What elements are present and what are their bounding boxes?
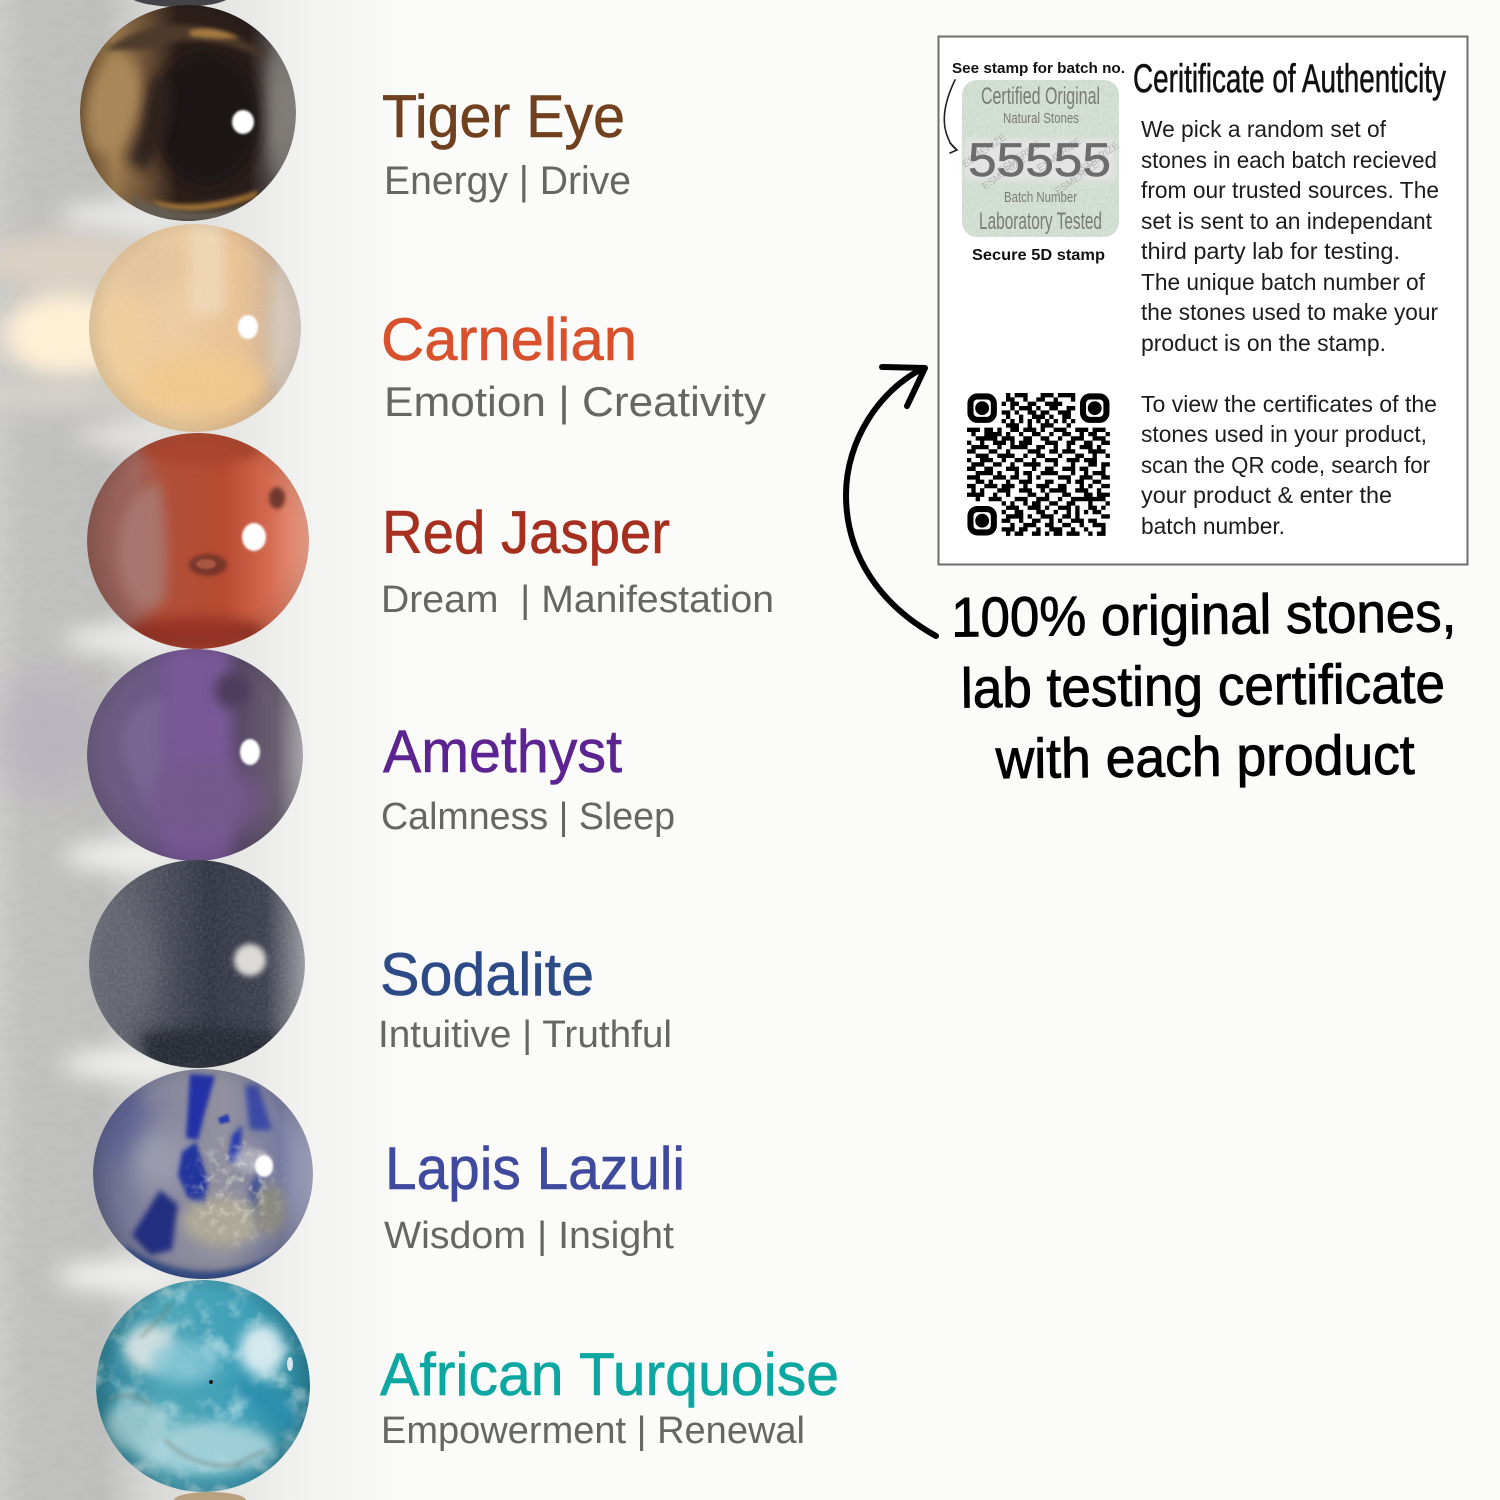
stone label: Red Jasper (381, 499, 774, 621)
callout: original stones statement: lab testing certificate (961, 651, 1445, 720)
panel: certificate of authenticity (938, 36, 1468, 564)
secure stamp: ESMERIZE (960, 132, 1009, 170)
text block: testing process: third party lab for testing. (1141, 238, 1400, 264)
callout: original stones statement (951, 580, 1458, 791)
stone label: Amethyst: Amethyst (383, 718, 622, 785)
bead: bottom fragment (174, 1492, 246, 1500)
callout: original stones statement: with each product (994, 723, 1415, 790)
secure stamp: Laboratory Tested (979, 208, 1102, 235)
icon: small pointer arrow (944, 80, 957, 153)
arrow: curved arrow pointing to certificate (846, 367, 936, 636)
secure stamp: ESMERIZE (1053, 159, 1102, 197)
bead: tiger eye (75, 5, 296, 222)
bead: sodalite (89, 860, 305, 1070)
text block: QR instructions: scan the QR code, search for (1141, 452, 1430, 478)
secure stamp: ESMERIZE (980, 154, 1029, 192)
stone label: Tiger Eye: Energy | Drive (384, 159, 631, 203)
secure stamp: Batch Number (1004, 189, 1077, 206)
stamp label: Secure 5D stamp (972, 247, 1105, 264)
background wall with shadows (0, 0, 324, 1500)
stone label: African Turquoise: Empowerment | Renewal (381, 1410, 805, 1452)
stone label: Amethyst: Calmness | Sleep (381, 796, 675, 838)
stone label: Carnelian: Carnelian (381, 306, 637, 373)
text block: testing process: We pick a random set of (1141, 116, 1386, 142)
text block: testing process: from our trusted sources. The (1141, 177, 1439, 203)
text block: testing process: stones in each batch recieved (1141, 147, 1437, 173)
secure stamp: Natural Stones (1003, 110, 1079, 127)
text block: testing process: the stones used to make your (1141, 299, 1438, 325)
secure stamp: ESMERIZE (1073, 140, 1122, 178)
bead: amethyst (87, 645, 303, 861)
secure stamp: ESMERIZE (995, 139, 1044, 177)
secure stamp: ESMERIZE (1035, 136, 1084, 174)
secure stamp: 55555 (968, 133, 1111, 186)
text block: QR instructions: your product & enter the (1141, 482, 1392, 508)
stone label: Sodalite: Intuitive | Truthful (378, 1014, 672, 1056)
text block: testing process: product is on the stamp. (1141, 330, 1386, 356)
stamp caption: See stamp for batch no. (952, 60, 1125, 77)
stone label: African Turquoise (380, 1341, 839, 1452)
text block: QR instructions (1141, 391, 1437, 539)
stone label: Lapis Lazuli: Wisdom | Insight (384, 1215, 674, 1257)
bead: red jasper (87, 433, 309, 649)
text block: QR instructions: To view the certificates of the (1141, 391, 1437, 417)
stone label: Red Jasper: Red Jasper (382, 499, 670, 566)
stone label: Amethyst (381, 718, 675, 838)
secure stamp: Certified Original (981, 83, 1100, 110)
bead: african turquoise (96, 1280, 310, 1492)
text block: QR instructions: stones used in your product, (1141, 421, 1427, 447)
text block: testing process: The unique batch number of (1141, 269, 1425, 295)
stone label: Tiger Eye (382, 83, 631, 203)
stone label: Lapis Lazuli: Lapis Lazuli (385, 1135, 685, 1202)
stone label: Red Jasper: Dream | Manifestation (381, 579, 774, 621)
QR code (967, 395, 1110, 534)
callout: original stones statement: 100% original stones, (951, 580, 1457, 649)
text block: testing process: set is sent to an independant (1141, 208, 1432, 234)
stone label: Sodalite: Sodalite (380, 941, 594, 1008)
stone label: African Turquoise: African Turquoise (380, 1341, 839, 1408)
stone label: Sodalite (378, 941, 672, 1056)
bead: carnelian (89, 220, 301, 432)
bead: lapis lazuli (93, 1069, 313, 1290)
text block: QR instructions: batch number. (1141, 513, 1285, 539)
text block: testing process (1141, 116, 1439, 356)
stone label: Tiger Eye: Tiger Eye (382, 83, 625, 150)
stone label: Lapis Lazuli (384, 1135, 685, 1257)
secure stamp (960, 80, 1122, 237)
bead: top fragment (128, 0, 232, 7)
stone label: Carnelian: Emotion | Creativity (384, 378, 766, 425)
stone label: Carnelian (381, 306, 766, 425)
